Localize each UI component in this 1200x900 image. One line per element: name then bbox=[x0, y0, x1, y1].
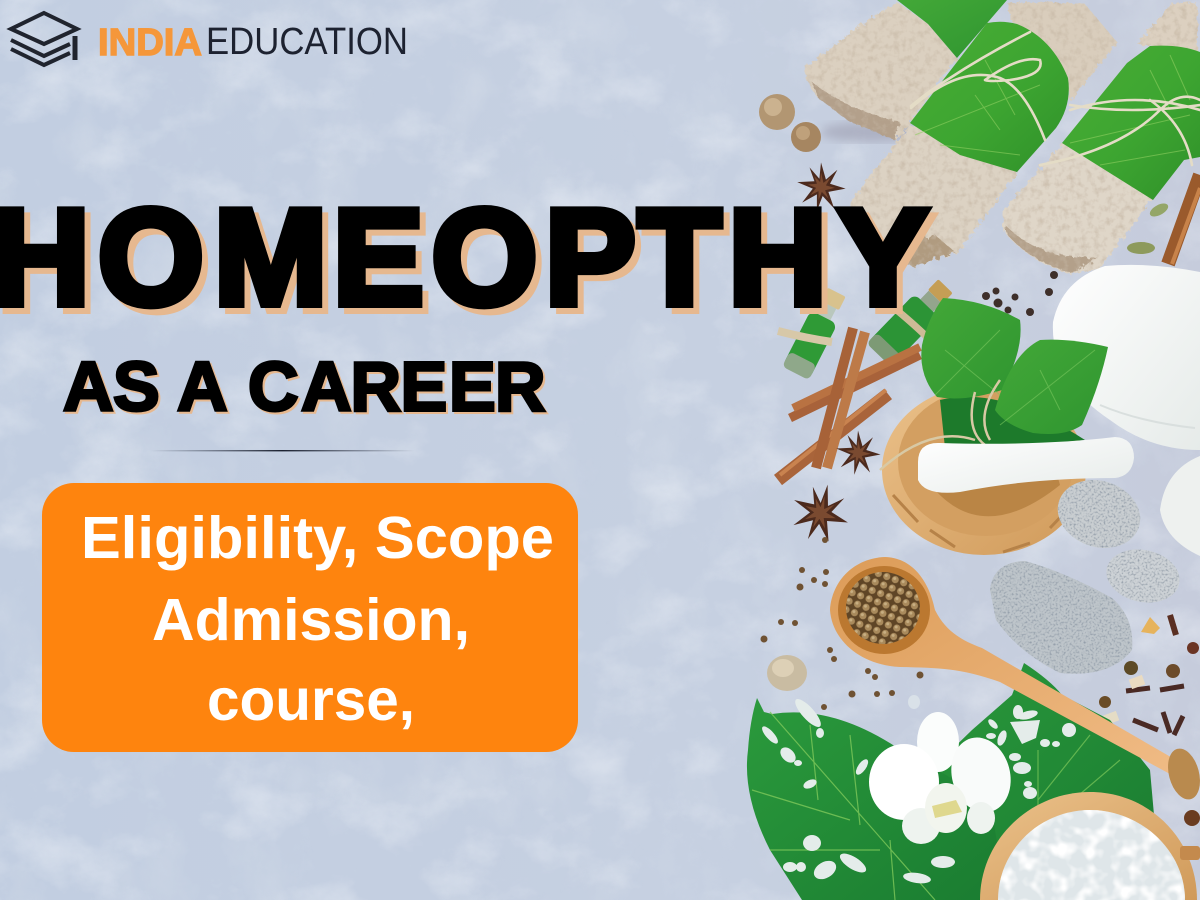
icon: star anise top bbox=[797, 162, 846, 211]
nutmeg lower bbox=[767, 655, 807, 691]
subtitle: as a career: AS A CAREER bbox=[63, 348, 546, 426]
subtitle: as a career: AS A CAREER bbox=[65, 350, 548, 428]
wooden mortar bbox=[882, 385, 1086, 555]
icon: star anise lower bbox=[785, 477, 856, 548]
bottle twine left bbox=[778, 331, 832, 342]
dark clove bits at bowl edge bbox=[1184, 810, 1200, 826]
twine ties bbox=[911, 32, 1200, 165]
honey dipper end bbox=[1163, 745, 1200, 803]
scattered coriander seeds bbox=[760, 537, 924, 710]
white herbal pouch bbox=[1053, 265, 1200, 450]
icon: star anise by cinnamon bbox=[836, 430, 880, 475]
white orchid bbox=[869, 712, 1019, 844]
orange callout panel bbox=[42, 483, 578, 752]
towel roll: top left bbox=[805, 2, 1117, 142]
title: HOMEOPTHY: HOMEOPTHY bbox=[0, 187, 934, 339]
large green leaf right bbox=[900, 663, 1154, 880]
logo: India Education bbox=[11, 13, 408, 65]
wooden spoon with coriander bbox=[830, 557, 1176, 774]
bottle twine right bbox=[893, 307, 930, 340]
green leaf wrap: middle bbox=[910, 22, 1069, 172]
green leaf wrap: right bbox=[1062, 46, 1200, 200]
cardamom pods bbox=[1127, 201, 1170, 254]
large green leaf left bbox=[747, 698, 1000, 900]
logo wordmark: EDUCATION bbox=[206, 21, 408, 63]
logo wordmark: INDIA bbox=[98, 22, 202, 64]
title: HOMEOPTHY: HOMEOPTHY bbox=[0, 181, 928, 333]
callout text: course, bbox=[207, 667, 415, 733]
icon: stacked books with graduation tassel bbox=[11, 13, 77, 65]
nutmeg pair bbox=[759, 94, 821, 152]
granite stones bbox=[990, 470, 1185, 674]
callout text: Admission, bbox=[152, 587, 470, 653]
wooden bowl of salt bbox=[980, 792, 1197, 900]
white salt crystals bbox=[760, 695, 1076, 885]
towel roll: middle bbox=[850, 125, 1018, 267]
small bottle right bbox=[867, 274, 958, 367]
logo wordmark bbox=[98, 21, 408, 64]
callout text bbox=[81, 505, 554, 733]
divider line bbox=[150, 450, 415, 451]
peppercorns bbox=[982, 271, 1058, 316]
small bottle left bbox=[782, 285, 850, 380]
green leaves in mortar bbox=[880, 298, 1108, 470]
bowl handle right edge bbox=[1180, 846, 1200, 860]
towel roll: right bbox=[1002, 3, 1197, 274]
callout text: Eligibility, Scope bbox=[81, 505, 554, 571]
white pestle bbox=[918, 437, 1134, 493]
photo collage: herbal items bbox=[747, 0, 1200, 900]
white pouch lower bbox=[1160, 456, 1200, 556]
cinnamon stick: right of towels bbox=[1168, 175, 1200, 264]
small spices and cloves bottom right bbox=[1099, 615, 1199, 735]
green leaf wrap: top bbox=[897, 0, 1007, 58]
cinnamon sticks bundle bbox=[778, 328, 920, 480]
